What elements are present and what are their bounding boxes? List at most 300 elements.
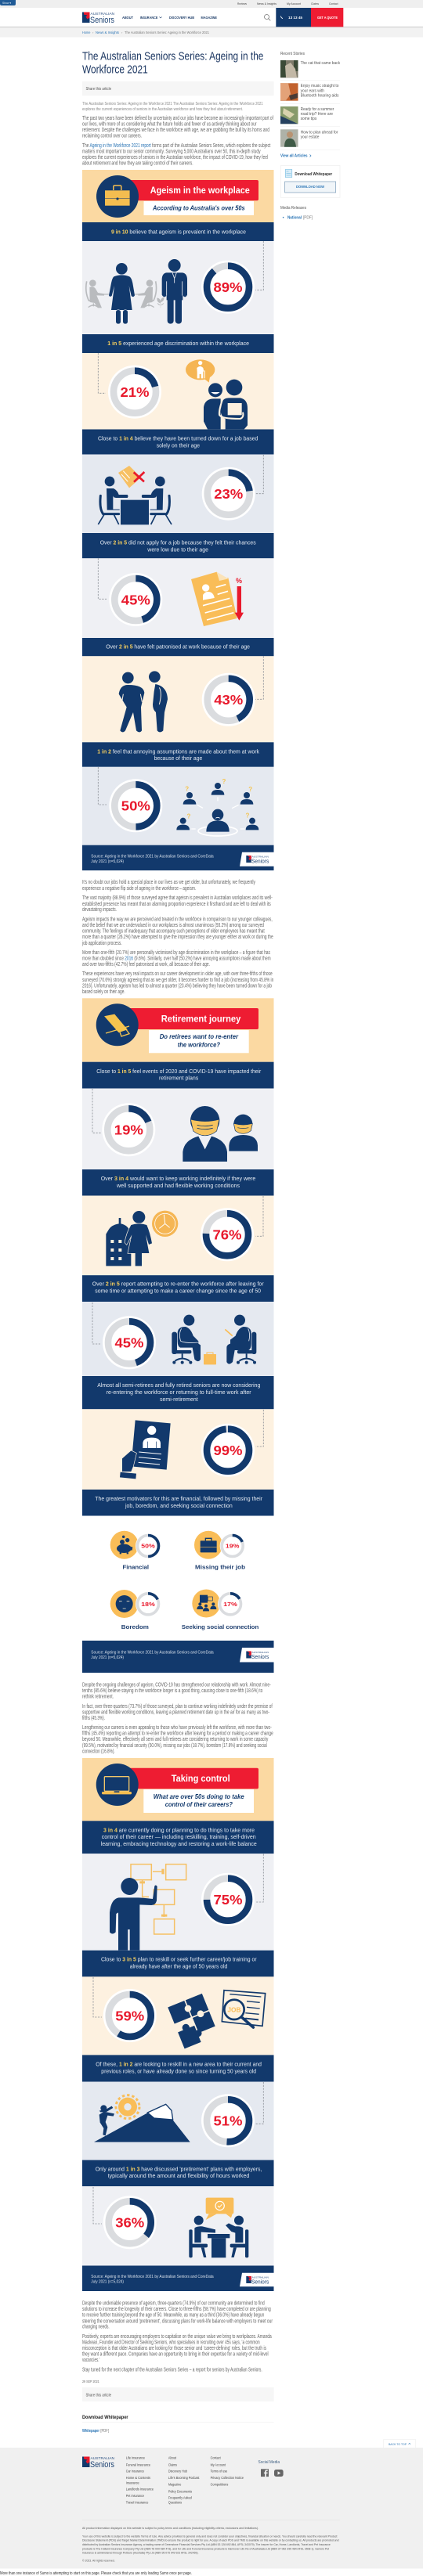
chart: 99 percent donut — [201, 1424, 255, 1477]
banner: 1 in 4 — [82, 429, 274, 454]
panel: ageism header: Ageism in the workplace — [150, 186, 250, 196]
icon: piggy bank — [117, 1536, 132, 1554]
banner: 3 in 4 taking control: learning, embracing technology and restoring a work-life balance — [101, 1840, 257, 1847]
back to top tab — [384, 2439, 416, 2448]
share bar bottom: Share this article — [86, 2393, 111, 2398]
story: plan your estate — [280, 129, 338, 147]
sidebar: media releases: National — [287, 216, 302, 221]
chart: 59 percent donut: 59% — [115, 2008, 145, 2023]
legal text: All product information displayed on this website is subject to policy terms and conditions (including eligibility criteria, exclusions and limitations). — [82, 2527, 258, 2530]
banner: 3 in 4 keep working — [82, 1169, 274, 1196]
text block: closing commentary: 29 SEP 2021 — [82, 2380, 99, 2383]
download whitepaper section: [PDF] — [100, 2429, 109, 2434]
text block: ageism commentary: more than doubled since 2016 (9.6%). Similarly, over half (50.2%) have annoying assumptions made about them — [82, 957, 271, 962]
banner: 3 in 5 reskill — [82, 1951, 274, 1976]
motivator: boredom: 18% — [141, 1601, 155, 1608]
breadcrumb bar: › — [121, 31, 123, 34]
text block: ageism commentary: surveyed (70.6%) strongly agreeing that as we get older, it becomes harder to find a job (increasing from 45.8% in — [82, 978, 273, 983]
text block: retirement commentary: supportive and flexible working conditions, leaving a planned retirement date up in the air for as many as two- — [82, 1710, 269, 1716]
chart: 45 percent donut — [109, 573, 162, 626]
breadcrumb bar: Home — [82, 31, 91, 34]
banner: almost all semi-retirees: re-entering the workforce or returning to full-time work after — [107, 1389, 251, 1396]
footer logo: Seniors — [90, 2460, 114, 2470]
chart: 50 percent donut: 50% — [121, 798, 150, 814]
panel: 75 percent reskilling — [82, 1854, 274, 1951]
chart: 19 percent donut: 19% — [114, 1122, 143, 1138]
story: bluetooth hearing aids: Enjoy music straight to — [301, 84, 339, 88]
text block: retirement commentary: fifths (45.3%). — [82, 1716, 105, 1721]
banner: 3 in 5 reskill: Close to 3 in 5 plan to reskill or seek further career/job training or — [101, 1955, 257, 1963]
banner: 1 in 2 reskill: previous roles, or have already done so since turning 50 years old — [101, 2068, 256, 2074]
title: Workforce 2021 — [82, 64, 148, 77]
sidebar: media releases: [PDF] — [303, 216, 313, 221]
source strip 2: July 2021 (n=5,024) — [91, 1655, 124, 1660]
chart: 50 percent donut — [109, 779, 162, 832]
footer links: company: Discovery Hub — [168, 2470, 187, 2474]
sidebar: media releases — [280, 206, 313, 221]
icon: group questioning one person — [176, 778, 258, 836]
text block: retirement commentary: connection (16.8%). — [82, 1749, 115, 1755]
social media: Social Media — [258, 2460, 280, 2465]
legal text: products is The Hollard Insurance Company Pty Ltd (ABN 78 090 584 473), and for Life and Funeral Insurance products is Hannover Life Re of Australasia Ltd (ABN 37 062 395 484 AFSL 3508 1). Seniors Pet — [82, 2547, 329, 2550]
icon: group questioning one person: ? — [246, 812, 250, 820]
text block: ageism commentary — [81, 880, 273, 995]
banner: 3 in 4 taking control: control of their career — including reskilling, training, self-driven — [102, 1833, 256, 1840]
legal text: distributed by Australian Seniors Insurance Agency, a trading name of Greenstone Financial Services Pty Ltd (ABN 53 128 692 884, AFSL 343079). The insurer for Car, Home, Landlords, Travel and Pet Insurance — [82, 2543, 331, 2546]
intro text: our lives, with more of us considering what the future holds and fewer of us actively thinking about our — [82, 122, 257, 128]
sidebar: download whitepaper card: DOWNLOAD NOW — [296, 185, 325, 189]
text block: closing commentary: solutions to increase the longevity of their careers. Close to three-fifths (58.7%) have completed or are planning — [82, 2307, 271, 2312]
text block: ageism commentary: experience a negative flip side of ageing in the workforce – ageism. — [82, 886, 196, 892]
logo: source strip three: AUSTRALIAN — [252, 2276, 269, 2279]
panel: 76 percent keep working — [82, 1196, 274, 1275]
intro text: retirement. Despite the challenges we face in the workforce with age, we are grabbing the bull by its horns and — [82, 128, 269, 133]
text block: ageism commentary: These experiences have very real impacts on our career development in older age, with over three-fifths of those — [82, 971, 273, 977]
icon: laptop — [102, 1777, 132, 1794]
banner: greatest motivators — [82, 1490, 274, 1515]
panel: 50 percent annoying assumptions — [82, 767, 274, 845]
banner: almost all semi-retirees: Almost all semi-retirees and fully retired seniors are now considering — [97, 1382, 260, 1389]
sidebar: download whitepaper card — [280, 166, 340, 197]
text block: ageism commentary: job application process. — [81, 941, 122, 946]
intro text: about retirement and how they are taking control of their careers. — [82, 161, 193, 167]
logo: source strip — [240, 852, 274, 866]
text block: ageism commentary: Ageism impacts the way we are perceived and treated in the workforce in comparison to our younger colleagues, — [82, 917, 273, 922]
icon: group questioning one person: ? — [222, 778, 226, 785]
footer links: insurance: Life Insurance — [126, 2456, 145, 2461]
banner: 3 in 4 taking control — [82, 1821, 274, 1854]
logo: Australian Seniors: AUSTRALIAN — [91, 12, 114, 16]
banner: pretirement — [82, 2160, 274, 2186]
banner: re-enter workforce — [82, 1275, 274, 1302]
intro text: The past two years have been defined by uncertainty and our jobs have become an increasingly important part of — [82, 116, 273, 121]
banner: 2 in 5 patronised — [82, 638, 274, 656]
motivator: financial: 50% — [141, 1543, 155, 1550]
title — [82, 51, 263, 77]
intro text — [82, 102, 273, 167]
footer links: contact: My Account — [211, 2463, 226, 2467]
share bar bottom — [82, 2387, 274, 2401]
banner: 2 in 5 low chances: Over 2 in 5 did not apply for a job because they felt their chances — [100, 539, 256, 546]
source strip 1 — [82, 845, 274, 870]
sidebar: recent stories: View all Articles — [280, 153, 308, 158]
banner: 2 in 5 patronised: Over 2 in 5 have felt patronised at work because of their age — [106, 643, 250, 650]
footer logo: AUSTRALIAN — [91, 2456, 114, 2460]
logo: Australian Seniors — [82, 12, 114, 25]
source strip 3 — [82, 2265, 274, 2291]
motivator: financial: Financial — [123, 1564, 149, 1570]
motivator: seeking social connection — [182, 1589, 259, 1630]
breadcrumb bar — [0, 27, 423, 38]
banner: COVID impact — [82, 1062, 274, 1088]
motivator: seeking social connection: 17% — [223, 1601, 237, 1608]
source strip 3: July 2021 (n=5,024) — [91, 2279, 124, 2284]
breadcrumb bar: News & Insights — [96, 31, 120, 34]
chart: 19 percent donut — [102, 1103, 155, 1156]
text block: closing commentary — [82, 2300, 273, 2383]
footer links: company: Life's Booming Podcast — [168, 2476, 200, 2481]
chart: 43 percent donut: 43% — [214, 692, 244, 708]
footer links: contact: Competitions — [211, 2483, 229, 2488]
icon: resume with down arrow — [191, 572, 244, 626]
banner: COVID impact: retirement plans — [159, 1074, 198, 1082]
icon: two figures talking — [119, 671, 168, 732]
text block: ageism commentary: based solely on their age. — [82, 989, 125, 995]
legal text — [82, 2527, 338, 2563]
text block: closing commentary: steering the conversation around 'pretirement', discussing plans for work-life balance with employers to meet our — [82, 2318, 273, 2324]
icon: search — [265, 14, 270, 20]
panel: 45 percent re-enter — [82, 1302, 274, 1376]
panel: retirement journey header: the workforce? — [178, 1041, 220, 1049]
chart: 99 percent donut: 99% — [213, 1443, 243, 1458]
icon: hand holding resume — [120, 1420, 171, 1479]
motivator: financial — [110, 1531, 161, 1570]
text block: ageism commentary: and the belief that we are undervalued in our workplaces is almost unanimous (93.2%) among our surveyed — [82, 923, 264, 928]
banner: 1 in 5 — [82, 334, 274, 353]
text block: closing commentary: Positively, experts are encouraging employers to capitalise on the unique value we bring to workplaces. Amanda — [82, 2334, 272, 2340]
download whitepaper section — [82, 2415, 274, 2434]
text block: ageism commentary: devastating impacts. — [82, 907, 117, 913]
text block: retirement commentary — [82, 1683, 273, 1755]
text block: retirement commentary: Despite the ongoing challenges of ageism, COVID-19 has strengthened our relationship with work. Almost nine- — [82, 1683, 271, 1688]
legal text: Disclosure Statement (PDS) and Target Market Determination (TMD) to ensure the product is right for you. A copy of each PDS and TMD is available on this website or by contacting us. All products are promoted and — [82, 2539, 338, 2542]
panel: retirement journey header: Retirement journey — [161, 1015, 241, 1025]
icon: deck chair — [105, 1014, 129, 1036]
text block: ageism commentary: community. The feelings of inadequacy that accompany such perceptions of older employees has meant that — [82, 929, 265, 935]
banner: pretirement: Only around 1 in 3 have discussed 'pretirement' plans with employers, — [96, 2165, 262, 2173]
text block: ageism commentary: It's no doubt our jobs hold a special place in our lives as we get older, but unfortunately, we frequently — [82, 880, 255, 885]
text block: closing commentary: Mackean, Founder and Director of Seeking Seniors, who specialises in recruiting over 45s says, 'a common — [82, 2340, 260, 2345]
footer links: company: Frequently Asked — [168, 2496, 192, 2501]
banner: re-enter workforce: Over 2 in 5 report attempting to re-enter the workforce after leaving for — [92, 1281, 264, 1287]
footer links: insurance — [126, 2456, 154, 2506]
source strip 1: Source: Ageing in the Workforce 2021 by Australian Seniors and CoreData — [91, 855, 214, 859]
logo: source strip two: Seniors — [251, 1653, 269, 1660]
chart: 43 percent donut — [202, 673, 255, 726]
panel: ageism header — [82, 170, 274, 222]
share bar top: Share this article — [86, 87, 111, 92]
icon: bored face — [116, 1595, 133, 1612]
site header with logo and navigation: DISCOVERY HUB — [169, 16, 195, 20]
footer links: company: About — [168, 2456, 177, 2461]
motivator: boredom: Boredom — [121, 1623, 149, 1630]
banner: 1 in 2 reskill: Of these, 1 in 2 are looking to reskill in a new area to their current and — [96, 2060, 262, 2068]
text block: retirement commentary: fifths (45.4%) reporting an attempt to re-enter the workforce after leaving for a period or making a career change — [82, 1731, 273, 1737]
chart: 51 percent donut: 51% — [213, 2113, 243, 2129]
banner: almost all semi-retirees — [82, 1376, 274, 1409]
chart: 75 percent donut — [201, 1873, 255, 1926]
banner: 3 in 4 keep working: Over 3 in 4 would want to keep working indefinitely if they were — [101, 1175, 255, 1182]
site header with logo and navigation: 13 13 45 — [288, 16, 302, 20]
icon: facebook — [261, 2469, 269, 2477]
panel: retirement journey header — [82, 998, 274, 1062]
footer links: company: Questions — [168, 2501, 182, 2506]
back to top tab: BACK TO TOP — [389, 2442, 407, 2446]
share bar top — [82, 81, 274, 95]
logo: Australian Seniors: Seniors — [90, 16, 114, 25]
banner: 1 in 2 — [82, 742, 274, 767]
footer links: company: Magazine — [168, 2483, 182, 2488]
text block: retirement commentary: (99.5%), motivated by financial security (50.0%), missing our jobs (18.7%), boredom (17.8%) and seeking social — [82, 1743, 267, 1749]
banner: 2 in 5 low chances: were low due to their age — [146, 546, 208, 553]
chart: 75 percent donut: 75% — [213, 1892, 243, 1908]
text block: closing commentary: Stay tuned for the next chapter of the Australian Seniors Series – a report for seniors by Australian Seniors. — [82, 2367, 262, 2372]
text block: closing commentary: misconception is that older Australians are looking for those senior and 'career-defining' roles, but the truth is — [82, 2346, 266, 2351]
banner: 9 in 10 — [82, 222, 274, 241]
top utility bar: Reviews — [237, 2, 247, 5]
icon: puzzle pieces — [168, 1994, 219, 2048]
icon: job search document — [222, 1991, 266, 2027]
text block: retirement commentary: Lengthening our careers is even appealing to those who have previously left the workforce, with more than two- — [82, 1725, 272, 1731]
banner: COVID impact: Close to 1 in 5 feel events of 2020 and COVID-19 have impacted their — [96, 1068, 262, 1075]
footer links: contact: Privacy Collection Notice — [211, 2476, 244, 2481]
text block: ageism commentary: The vast majority (88.9%) of those surveyed agree that ageism is prevalent in Australian workplaces and its well- — [82, 895, 273, 901]
social media — [258, 2460, 284, 2477]
intro text: reclaiming control over our careers. — [82, 134, 142, 139]
panel: 51 percent new area — [82, 2082, 274, 2160]
panel: 45 percent patronised — [82, 558, 274, 638]
story: plan your estate: How to plan ahead for — [301, 130, 338, 135]
chart: 89 percent donut: 89% — [213, 279, 243, 295]
footer — [0, 2448, 423, 2569]
banner: 1 in 2: because of their age — [154, 755, 202, 762]
banner: almost all semi-retirees: semi-retirement — [160, 1396, 199, 1403]
icon: office figures — [86, 259, 187, 324]
breadcrumb bar: › — [92, 31, 94, 34]
top utility bar: Claims — [311, 2, 319, 5]
panel: retirement journey header: Do retirees want to re-enter — [160, 1032, 239, 1040]
site header with logo and navigation: INSURANCE — [140, 16, 157, 20]
banner: greatest motivators: job, boredom, and seeking social connection — [125, 1502, 233, 1509]
chart: 21 percent donut: 21% — [121, 384, 150, 400]
footer links: insurance: Home & Contents — [126, 2476, 150, 2481]
site header with logo and navigation: ABOUT — [122, 16, 133, 20]
footer links: insurance: Funeral Insurance — [126, 2463, 150, 2467]
story: bluetooth hearing aids — [280, 83, 339, 101]
story: plan your estate: your estate — [301, 135, 319, 139]
chart: 45 percent donut retirees: 45% — [114, 1335, 144, 1351]
chart: 76 percent donut: 76% — [213, 1227, 242, 1243]
icon: small briefcase — [201, 1538, 217, 1552]
story: summer road trip: some tips — [301, 117, 317, 121]
chart: 23 percent donut: 23% — [214, 486, 244, 502]
source strip 2 — [82, 1641, 274, 1673]
story: bluetooth hearing aids: your ears with — [301, 89, 324, 94]
top utility bar: News & Insights — [257, 2, 277, 5]
banner: 9 in 10: 9 in 10 believe that ageism is prevalent in the workplace — [111, 229, 246, 236]
icon: people and screens — [197, 1595, 216, 1611]
intro text: The Australian Seniors Series: Ageing in the Workforce 2021 The Australian Seniors Series: Ageing in the Workforce 2021 — [82, 102, 263, 106]
title: The Australian Seniors Series: Ageing in the — [82, 51, 263, 63]
banner: re-enter workforce: some time or attempting to make a career change since the age of 50 — [95, 1287, 261, 1295]
banner: 1 in 5: 1 in 5 experienced age discrimination within the workplace — [107, 340, 249, 347]
site header with logo and navigation: MAGAZINE — [201, 16, 217, 20]
download whitepaper section: Download Whitepaper — [82, 2415, 128, 2420]
panel: 36 percent pretirement — [82, 2186, 274, 2265]
panel: 23 percent did not apply — [82, 454, 274, 533]
footer links: contact: Contact — [211, 2456, 221, 2461]
icon: meeting with speech bubble — [189, 2198, 248, 2257]
chart: 36 percent donut — [103, 2196, 157, 2249]
text block: closing commentary: changing needs. — [82, 2325, 110, 2330]
sidebar: recent stories — [280, 52, 340, 158]
icon: group questioning one person: ? — [185, 785, 189, 792]
story: summer road trip — [280, 106, 334, 124]
source strip 1: July 2021 (n=5,024) — [91, 859, 124, 864]
story: the cat: The cat that came back — [301, 61, 340, 66]
banner: 2 in 5 low chances — [82, 533, 274, 558]
logo: source strip three — [240, 2273, 274, 2286]
icon: man with org chart — [110, 1864, 186, 1951]
icon: building, woman and clock — [106, 1211, 178, 1266]
sumo warning message: More than one instance of Sumo is attempting to start on this page. Please check that you are only loading Sumo once per page. — [0, 2571, 192, 2576]
chart: 45 percent donut: 45% — [121, 592, 150, 607]
text block: retirement commentary: rethink retirement. — [82, 1694, 114, 1700]
icon: resume with down arrow: % — [236, 577, 242, 585]
legal text: Insurance is administered through PetSure (Australia) Pty Ltd (ABN 95 075 949 923 AFSL 342459). — [82, 2552, 198, 2555]
footer links: insurance: Landlords Insurance — [126, 2488, 154, 2492]
panel: 19 percent covid — [82, 1088, 274, 1169]
story: bluetooth hearing aids: Bluetooth hearing aids — [301, 94, 339, 99]
icon: youtube — [274, 2470, 284, 2477]
top utility bar: My Account — [287, 2, 301, 5]
icon: two people and speech bubble — [186, 359, 248, 429]
icon: job search document: JOB — [227, 2005, 241, 2013]
text block: ageism commentary: More than one-fifth (20.7%) are personally victimised by age discrimination in the workplace – a figure that has — [82, 950, 270, 956]
logo: source strip two: AUSTRALIAN — [252, 1651, 269, 1654]
chart: 76 percent donut — [201, 1208, 254, 1261]
chart: 59 percent donut — [103, 1989, 157, 2042]
top utility bar: Contact — [329, 2, 338, 5]
text block: retirement commentary: tenths (85.6%) believe staying in the workforce longer is a good thing, causing close to one-fifth (18.6%) to — [82, 1688, 262, 1694]
story: summer road trip: road trip? Here are — [301, 112, 333, 117]
text block: retirement commentary: In fact, over three-quarters (73.7%) of those surveyed, plan to continue working indefinitely under the premise of — [82, 1704, 273, 1710]
text block: closing commentary: they want a different pace. Companies have an opportunity to bring in their expertise for a variety of mid-level — [82, 2351, 269, 2357]
panel: 89 percent prevalent — [82, 241, 274, 334]
logo: source strip: AUSTRALIAN — [252, 855, 269, 858]
footer links: insurance: Insurance — [126, 2481, 139, 2485]
sidebar: recent stories: Recent Stories — [280, 52, 305, 56]
icon: climbing mountain — [94, 2095, 190, 2142]
banner: 3 in 4 taking control: 3 in 4 are currently doing or planning to do things to take more — [103, 1827, 255, 1833]
banner: pretirement: typically around the amount and flexibility of hours worked — [108, 2172, 249, 2179]
panel: taking control header — [82, 1758, 274, 1821]
banner: 1 in 4: Close to 1 in 4 believe they have been turned down for a job based — [98, 435, 258, 441]
icon: group questioning one person: ? — [248, 786, 252, 793]
sidebar: media releases: Media Releases — [280, 206, 306, 211]
chart: 51 percent donut — [201, 2094, 255, 2147]
panel: taking control header: Taking control — [172, 1774, 230, 1784]
chart: 23 percent donut — [202, 467, 255, 521]
icon: briefcase — [105, 186, 130, 206]
footer logo — [82, 2456, 114, 2470]
text block: ageism commentary: and over two-fifths (42.7%) feel patronised at work, all because of their age. — [82, 962, 210, 967]
intro text: matters most important to our senior community. Surveying 5,000 Australians over 50, this in-depth study — [82, 149, 261, 154]
intro text: explores the current experiences of seniors in the Australian workforce, the impact of COVID-19, how they feel — [82, 155, 268, 160]
panel: 99 percent returning — [82, 1409, 274, 1490]
text block: ageism commentary: 2016). Unfortunately, ageism has led to almost a quarter (23.4%) believing they have been turned down for a job — [82, 983, 272, 989]
icon: whitepaper document — [285, 169, 292, 177]
sidebar: download whitepaper card: Download Whitepaper — [295, 172, 332, 177]
icon: job interview seated — [172, 1315, 256, 1364]
chart: 89 percent donut — [201, 261, 255, 314]
site header with logo and navigation: GET A QUOTE — [317, 16, 338, 20]
top utility bar: Show ▾ — [2, 2, 11, 5]
footer links: company: Claims — [168, 2463, 177, 2467]
text block: retirement commentary: beyond 50. Meanwhile, effectively all semi and full retirees are considering returning to work in some capacity — [82, 1737, 269, 1742]
panel: 43 percent assumptions — [82, 656, 274, 742]
motivator: missing their job: Missing their job — [195, 1564, 245, 1570]
footer links: company: Policy Documents — [168, 2489, 192, 2494]
intro text: explores the current experiences of seniors in the Australian workforce and how they feel about retirement. — [82, 107, 243, 112]
footer links: insurance: Pet Insurance — [126, 2494, 144, 2499]
icon: job interview rejected — [98, 466, 172, 524]
motivator: boredom — [110, 1590, 161, 1630]
banner: 3 in 5 reskill: already have after the age of 50 years old — [130, 1963, 227, 1969]
text block: closing commentary: vacancies.' — [82, 2358, 99, 2363]
chart: 45 percent donut retirees — [103, 1316, 156, 1369]
banner: 1 in 4: solely on their age — [157, 441, 200, 449]
breadcrumb bar: The Australian Seniors Series: Ageing in the Workforce 2021 — [125, 31, 209, 34]
panel: motivators — [110, 1531, 259, 1630]
footer links: insurance: Car Insurance — [126, 2470, 144, 2474]
icon: people with masks — [183, 1106, 258, 1162]
top utility bar — [0, 0, 423, 8]
banner: 1 in 2 reskill — [82, 2055, 274, 2082]
intro text: The Ageing in the Workforce 2021 report forms part of the Australian Seniors Series, which explores the subject — [82, 143, 270, 149]
motivator: seeking social connection: Seeking social connection — [182, 1623, 259, 1630]
motivator: missing their job: 19% — [226, 1543, 240, 1550]
panel: 59 percent further training — [82, 1976, 274, 2055]
logo: source strip two — [240, 1648, 274, 1663]
download whitepaper section: Whitepaper — [82, 2429, 99, 2434]
panel: taking control header: control of their careers? — [165, 1800, 233, 1808]
text block: ageism commentary: established presence has meant that an alarming proportion experience it firsthand and are left to deal with its — [82, 902, 271, 907]
banner: 1 in 2: 1 in 2 feel that annoying assumptions are made about them at work — [97, 748, 259, 755]
footer links: contact: Terms of use — [211, 2470, 228, 2474]
logo: source strip three: Seniors — [251, 2278, 269, 2286]
text block: closing commentary: Despite the undeniable presence of ageism, three-quarters (74.9%) of our community are determined to find — [82, 2300, 265, 2306]
logo: source strip: Seniors — [251, 858, 269, 864]
source strip 2: Source: Ageing in the Workforce 2021 by Australian Seniors and CoreData — [91, 1650, 214, 1655]
banner: 3 in 4 keep working: well supported and had flexible working conditions — [116, 1182, 240, 1189]
panel: ageism header: According to Australia's over 50s — [152, 204, 245, 212]
legal text: © 2023. All rights reserved. — [82, 2560, 115, 2563]
site header with logo and navigation — [0, 8, 423, 27]
chart: 36 percent donut: 36% — [115, 2215, 145, 2231]
legal text: Your use of this website is subject to the website Terms of Use. Any advice provided is general only and does not consider your objectives, financial situation or needs. You should carefully read the relevant Product — [82, 2535, 337, 2538]
banner: greatest motivators: The greatest motivators for this are financial, followed by missing their — [95, 1495, 262, 1502]
